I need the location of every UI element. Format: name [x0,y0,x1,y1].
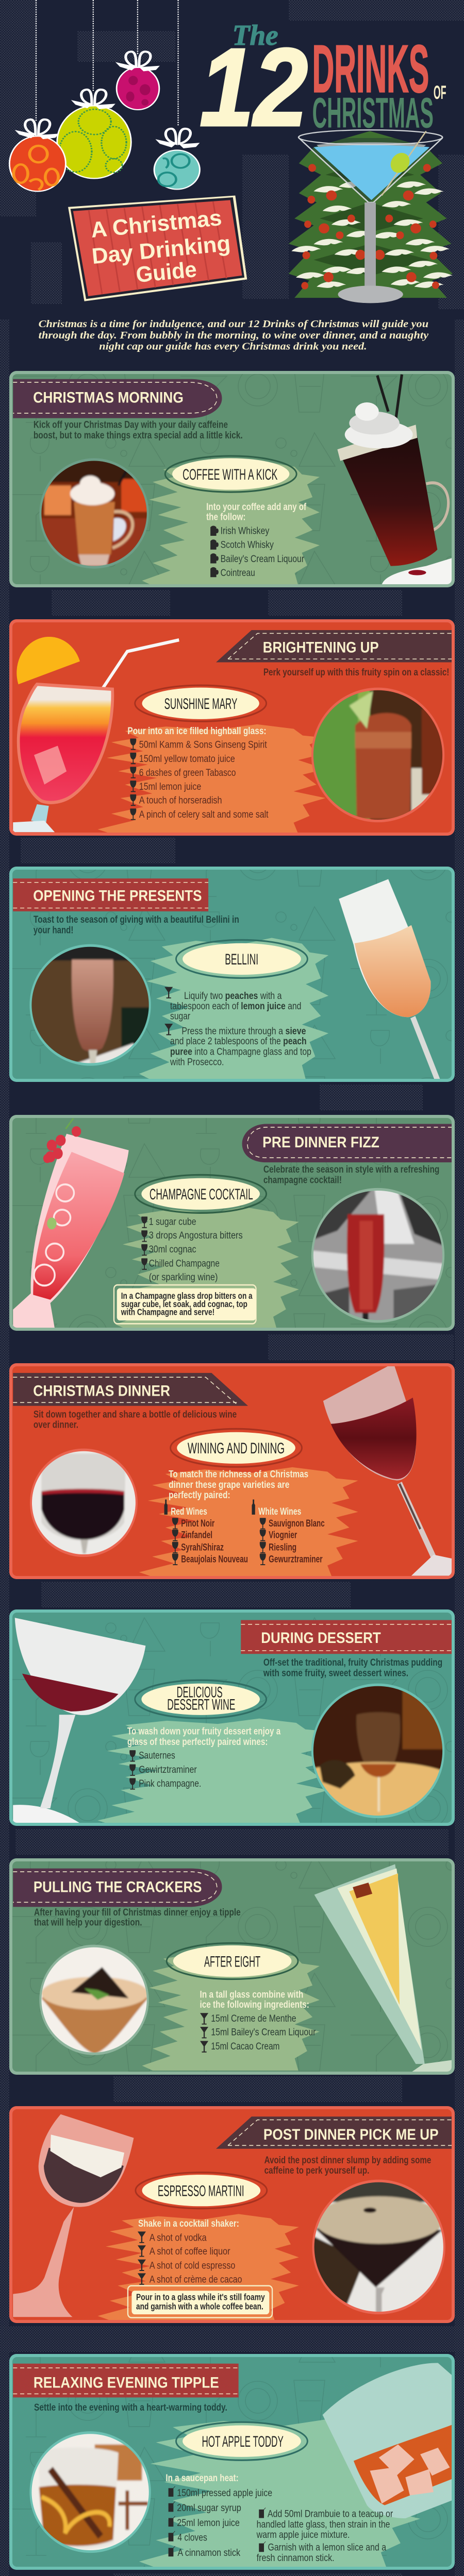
instructions: Chilled Champagne [149,1258,220,1269]
note box [128,2286,272,2318]
drink name oval: ESPRESSO MARTINI [158,2182,244,2199]
brush stroke [142,1952,320,2071]
list: red wines: Syrah/Shiraz [181,1542,224,1553]
note box: Pour in to a glass while it's still foamy [136,2293,265,2302]
drink name oval: AFTER EIGHT [204,1953,260,1970]
instructions: 3 drops Angostura bitters [149,1230,243,1241]
drink name oval [165,456,296,492]
brush stroke [139,938,328,1079]
panel: during dessert [9,1609,455,1826]
list: red wines: Red Wines [171,1506,207,1517]
illustration: after eight glass [314,1864,452,2072]
list: white wines: Viognier [269,1530,297,1540]
instructions [165,2472,272,2558]
heading ribbon: POST DINNER PICK ME UP [263,2126,439,2143]
description: Kick off your Christmas Day with your daily caffeine [34,419,228,430]
description [34,419,243,440]
intro text: night cap our guide has every Christmas drink you need. [99,341,367,352]
heading ribbon: CHRISTMAS DINNER [33,1382,170,1399]
drink name oval: WINING AND DINING [188,1440,285,1456]
description: Settle into the evening with a heart-warming toddy. [34,2402,227,2413]
brush stroke [139,2418,420,2568]
instructions: tablespoon each of lemon juice and [170,1001,301,1011]
instructions: 20ml sugar syrup [177,2502,241,2513]
description: with some fruity, sweet dessert wines. [263,1668,408,1679]
christmas tree [289,131,453,298]
title [200,20,446,149]
heading ribbon [216,630,452,663]
panel: brightening up [9,619,455,836]
description: caffeine to perk yourself up. [264,2165,369,2176]
description: Celebrate the season in style with a refreshing [263,1164,439,1175]
bauble: orange [9,120,65,191]
list: white wines: White Wines [258,1506,301,1517]
description [34,1907,241,1928]
illustration: espresso martini glass [13,2114,134,2317]
martini glass [299,130,442,303]
heading ribbon [242,1124,452,1162]
photo: red wine [29,1449,139,1557]
photo: champagne cocktail [311,1188,447,1323]
title: The [233,20,278,51]
intro text [39,318,429,352]
note box: and garnish with a whole coffee bean. [136,2302,263,2312]
bauble: yellow [57,90,131,178]
list: red wines: Pinot Noir [181,1518,214,1529]
instructions: 15ml Bailey's Cream Liquour [211,2027,316,2038]
drink name oval: BELLINI [225,951,258,968]
heading ribbon: OPENING THE PRESENTS [33,887,202,904]
instructions: 6 dashes of green Tabasco [139,767,236,778]
drink name oval [176,2422,307,2460]
title: 12 [200,26,308,149]
list: red wines: Beaujolais Nouveau [181,1553,248,1564]
photo: after eight [39,1942,151,2057]
intro text: through the day. From bubbly in the morning, to wine over dinner, and a naughty [39,330,429,341]
instructions: A shot of vodka [150,2232,207,2243]
instructions: 4 cloves [177,2532,207,2543]
instructions: To match the richness of a Christmas [169,1469,308,1480]
heading ribbon [13,878,208,911]
heading ribbon [13,379,222,418]
instructions: A cinnamon stick [177,2547,241,2558]
instructions: Sauternes [139,1750,175,1761]
instructions: 15ml lemon juice [139,781,201,792]
instructions: Into your coffee add any of [206,501,307,512]
method: handled latte glass, then strain in the [257,2519,390,2530]
instructions: Shake in a cocktail shaker: [138,2218,239,2229]
illustration: whisky tumbler [323,2363,452,2518]
heading ribbon: RELAXING EVENING TIPPLE [34,2374,219,2391]
instructions [127,1726,281,1790]
instructions: puree into a Champagne glass and top [170,1046,311,1057]
photo: dessert wine [311,1684,447,1818]
photo: bellini [29,944,154,1066]
drink name oval: COFFEE WITH A KICK [183,466,278,483]
subtitle sign [68,195,247,301]
instructions: To wash down your fruity dessert enjoy a [127,1726,281,1737]
instructions: In a saucepan heat: [165,2472,239,2483]
subtitle sign: Day Drinking [91,231,231,269]
photo: coffee mug [39,456,151,571]
instructions: Scotch Whisky [221,539,274,550]
list: white wines [252,1499,325,1565]
subtitle sign: A Christmas [90,206,223,243]
panel: opening the presents [9,867,455,1082]
panel: christmas morning [9,371,455,587]
photo: sunshine mary [311,688,447,824]
instructions: Press the mixture through a sieve [181,1026,306,1037]
description: Avoid the post dinner slump by adding some [264,2155,431,2165]
panel: christmas dinner [9,1363,455,1579]
drink name oval [171,1429,302,1467]
heading ribbon [241,1620,452,1654]
description [264,2155,431,2176]
method: Add 50ml Drambuie to a teacup or [268,2509,393,2519]
photo: espresso martini [311,2179,447,2314]
heading ribbon: CHRISTMAS MORNING [33,389,184,406]
description [263,1164,439,1185]
drink name oval: DESSERT WINE [167,1696,235,1713]
illustration: champagne flute [339,879,438,1081]
panel: relaxing evening tipple [9,2354,455,2570]
heading ribbon: DURING DESSERT [261,1630,381,1646]
instructions: 15ml Cacao Cream [211,2041,279,2052]
drink name oval: CHAMPAGNE COCKTAIL [150,1186,253,1203]
instructions: dinner these grape varieties are [169,1479,289,1490]
instructions: Cointreau [221,567,255,578]
description: boost, but to make things extra special add a little kick. [34,430,243,440]
instructions: A pinch of celery salt and some salt [139,809,269,820]
header section [9,0,453,352]
instructions [169,1469,308,1500]
method: Garnish with a lemon slice and a [268,2542,387,2553]
illustration: pink flute [13,1118,129,1329]
instructions: Pink champagne. [139,1778,201,1789]
brush stroke [142,462,320,586]
instructions: In a tall glass combine with [200,1989,303,2000]
instructions [206,501,307,578]
list: white wines: Gewurztraminer [269,1553,323,1564]
drink name oval [135,1680,267,1718]
list: white wines: Sauvignon Blanc [269,1518,325,1529]
instructions [127,725,269,820]
description: champagne cocktail! [263,1175,342,1185]
instructions [141,1216,243,1282]
instructions [164,987,311,1067]
bauble: pink [115,52,160,110]
heading ribbon: PULLING THE CRACKERS [34,1878,202,1895]
illustration: coffee glass [337,375,453,585]
instructions: A touch of horseradish [139,795,222,806]
photo: hot toddy [29,2431,154,2553]
instructions: glass of these perfectly paired wines: [127,1736,268,1747]
description: your hand! [34,925,73,936]
heading ribbon [13,1373,248,1406]
hanging strings [36,0,178,127]
list: red wines: Zinfandel [181,1530,212,1540]
bauble: teal [154,129,200,189]
list: red wines [164,1499,248,1565]
drink name oval [176,940,307,978]
instructions: 25ml lemon juice [177,2517,240,2528]
brush stroke [97,2214,299,2320]
instructions: 150ml pressed apple juice [177,2487,272,2498]
panel: pre dinner fizz [9,1115,455,1331]
heading ribbon: BRIGHTENING UP [263,639,379,656]
method: warm apple juice mixture. [256,2529,350,2540]
brush stroke [97,1719,328,1825]
instructions: 1 sugar cube [149,1216,196,1227]
brush stroke [115,1207,299,1329]
description [263,1657,442,1679]
instructions: 50ml Kamm & Sons Ginseng Spirit [139,739,267,750]
drink name oval [167,1943,298,1979]
illustration: sunshine cocktail [13,637,179,832]
description: After having your fill of Christmas dinner enjoy a tipple [34,1907,241,1918]
instructions: with Prosecco. [170,1057,224,1067]
instructions: 30ml cognac [149,1244,196,1255]
drink name oval [135,1175,267,1213]
note box [114,1285,256,1324]
brush stroke [139,1467,358,1577]
instructions: perfectly paired: [169,1489,230,1500]
brush stroke [97,724,325,834]
instructions: Pour into an ice filled highball glass: [127,725,267,736]
instructions: A shot of coffee liquor [150,2246,230,2257]
instructions: the follow: [206,512,245,522]
description: Sit down together and share a bottle of delicious wine [34,1409,237,1420]
subtitle sign: Guide [135,257,198,287]
illustration: coupe glass [13,1618,145,1823]
heading ribbon [13,1869,222,1907]
drink name oval [135,685,267,721]
instructions: 15ml Creme de Menthe [211,2013,296,2024]
note box: In a Champagne glass drop bitters on a [121,1291,253,1301]
panel: pulling the crackers [9,1858,455,2075]
panel: post dinner pick me up [9,2106,455,2323]
method: fresh cinnamon stick. [257,2552,335,2563]
instructions: A shot of cold espresso [150,2260,235,2271]
drink name oval: DELICIOUS [177,1684,223,1701]
note box: with Champagne and serve! [121,1308,214,1317]
drink name oval: SUNSHINE MARY [164,696,237,712]
instructions: sugar [170,1011,190,1022]
instructions: Irish Whiskey [221,526,270,536]
list: white wines: Riesling [269,1542,296,1553]
note box: sugar cube, let soak, add cognac, top [121,1299,247,1309]
instructions: and place 2 tablespoons of the peach [170,1036,307,1046]
instructions: A shot of crème de cacao [150,2274,242,2284]
description [34,1409,237,1430]
heading ribbon: PRE DINNER FIZZ [262,1134,379,1150]
description [34,914,239,936]
instructions: ice the following ingredients: [200,1999,309,2010]
instructions [138,2218,242,2285]
instructions: Bailey's Cream Liquour [221,553,304,564]
instructions: Liquify two peaches with a [184,990,282,1001]
heading ribbon [216,2116,452,2149]
description: Toast to the season of giving with a beautiful Bellini in [34,914,239,925]
description: over dinner. [34,1419,78,1430]
instructions: Gewirtztraminer [139,1764,197,1775]
instructions: (or sparkling wine) [149,1272,218,1282]
illustration: wine glass [323,1363,452,1575]
method [256,2507,393,2563]
description: that will help your digestion. [34,1917,142,1928]
drink name oval: HOT APPLE TODDY [202,2433,284,2450]
drink name oval [136,2173,267,2209]
heading ribbon [13,2364,239,2397]
description: Off-set the traditional, fruity Christmas pudding [263,1657,442,1668]
instructions: 150ml yellow tomato juice [139,753,235,764]
instructions [200,1989,316,2053]
